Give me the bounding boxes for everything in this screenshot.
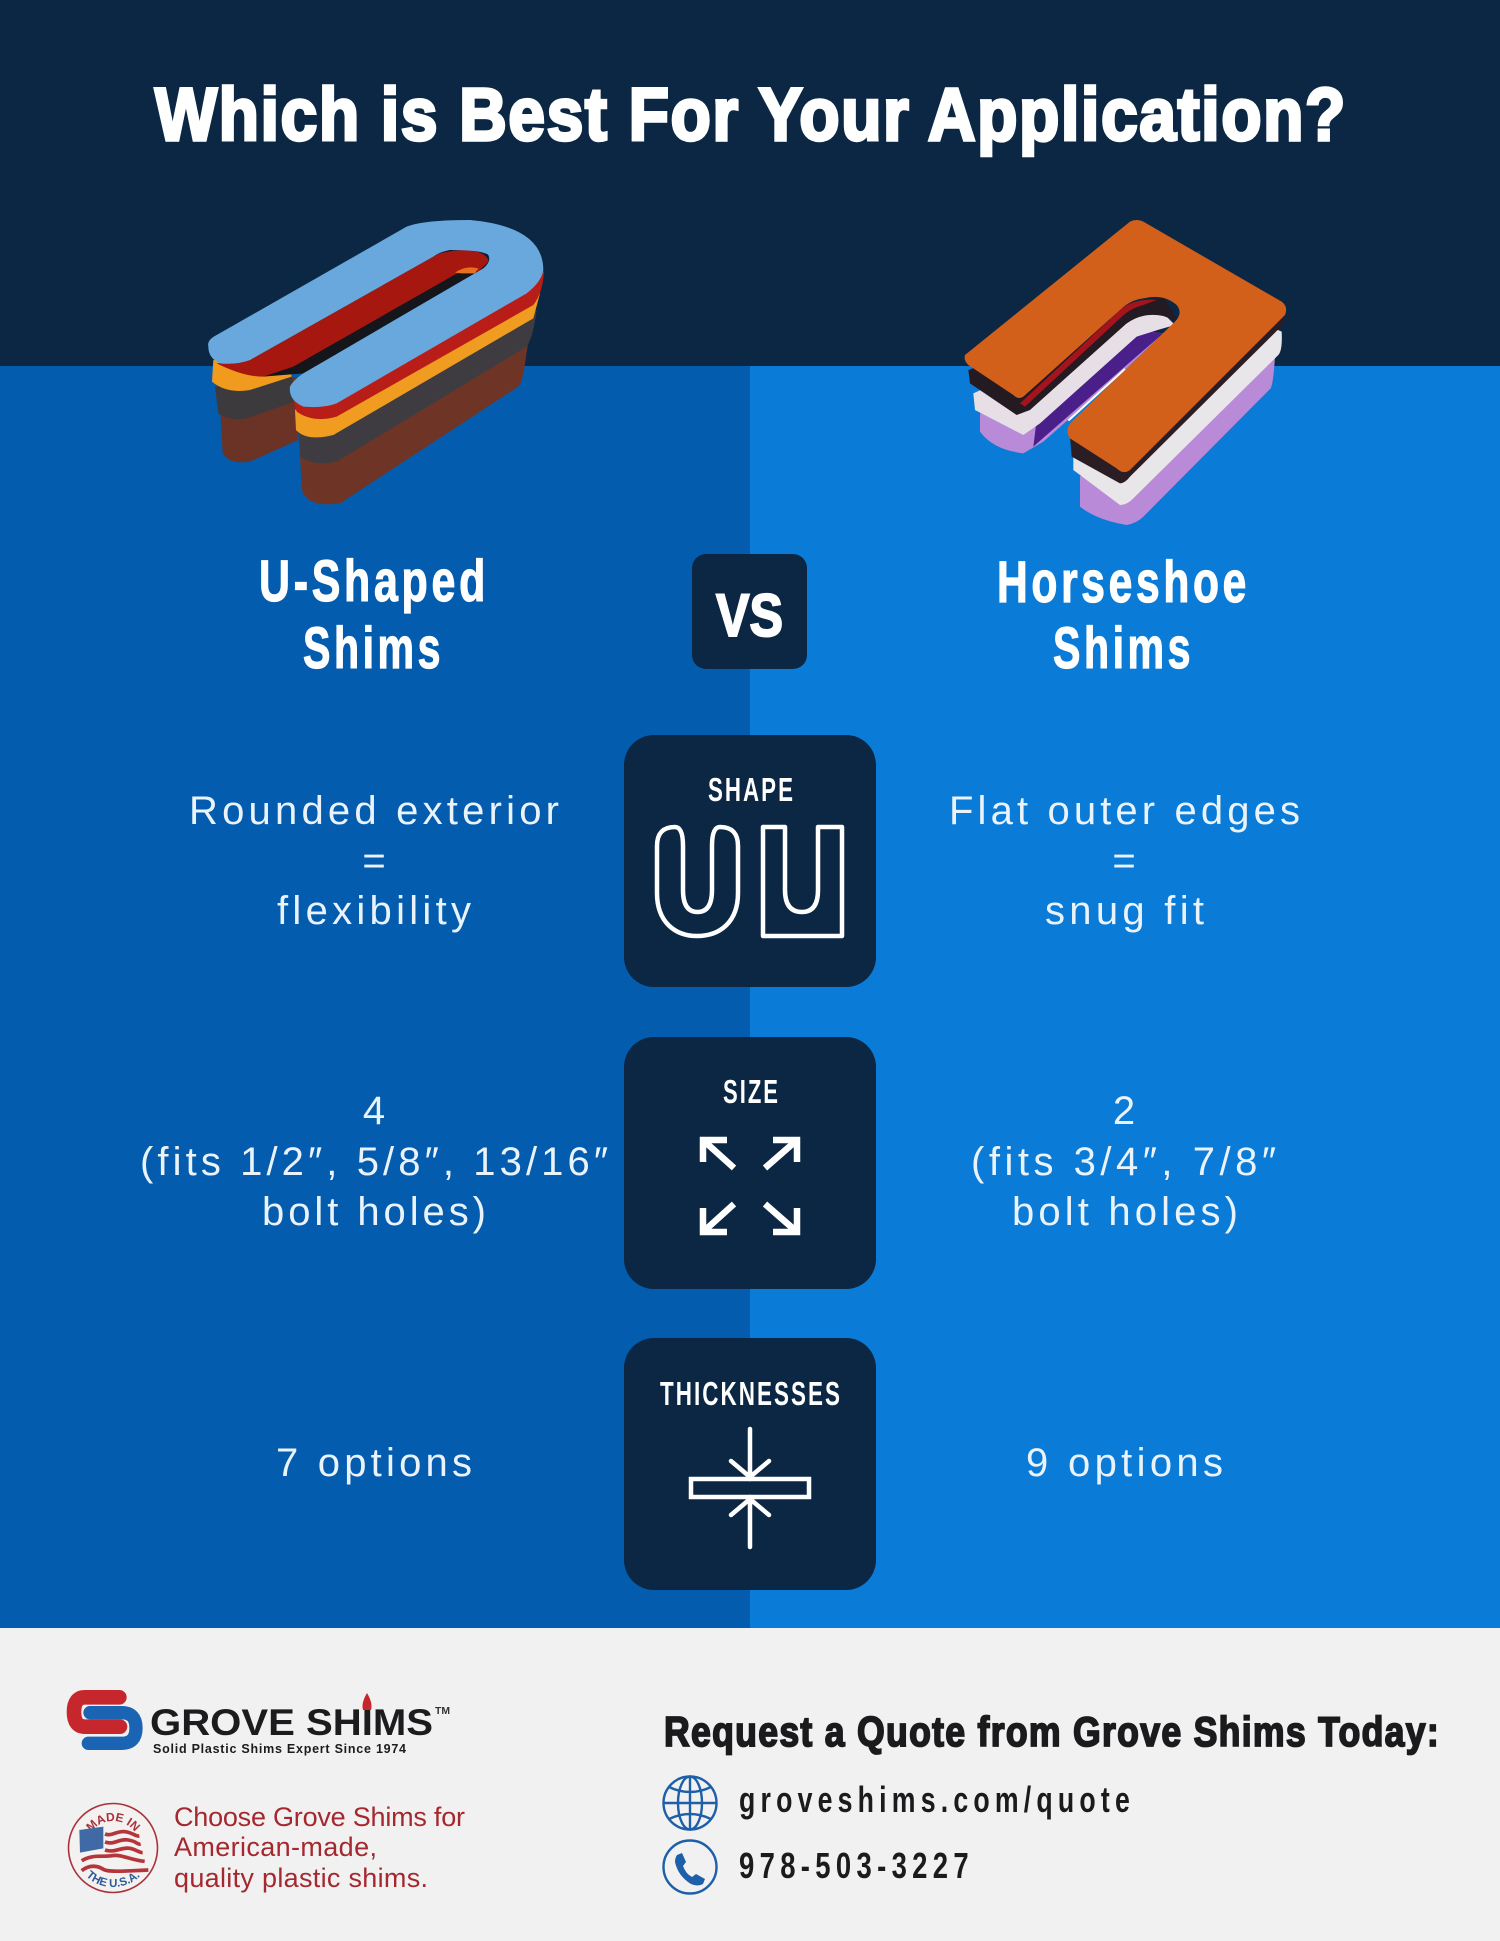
heading: U-shaped shims: U-Shaped bbox=[259, 549, 489, 614]
text: American-made message bbox=[174, 1802, 465, 1893]
text: U-shaped size description: (fits 1/2″, 5/8″, 13/16″ bbox=[140, 1140, 608, 1184]
text: quote URL: groveshims.com/quote bbox=[739, 1779, 1135, 1820]
logo: Grove Shims bbox=[74, 1693, 450, 1756]
card: size bbox=[624, 1037, 876, 1289]
card: thicknesses bbox=[624, 1338, 876, 1590]
heading: U-shaped shims: Shims bbox=[303, 616, 444, 681]
badge: made in the USA bbox=[68, 1802, 158, 1894]
text: horseshoe size description: bolt holes) bbox=[1012, 1190, 1238, 1234]
panel: right column background bbox=[750, 366, 1500, 1628]
icon: flame over the I bbox=[362, 1693, 372, 1710]
title: Which is Best For Your Application? bbox=[155, 73, 1347, 156]
heading: U-shaped shims bbox=[259, 549, 489, 681]
card: shape: SHAPE bbox=[708, 771, 795, 808]
image: U-shaped shim stack bbox=[208, 220, 544, 504]
text: U-shaped size description bbox=[140, 1089, 608, 1234]
logo: Grove Shims: TM bbox=[435, 1706, 450, 1717]
text: U-shaped thickness options: 7 options bbox=[276, 1441, 472, 1485]
icon: square U outline bbox=[763, 827, 842, 936]
text: U-shaped shape description: flexibility bbox=[277, 889, 471, 933]
text: horseshoe shape description: Flat outer edges bbox=[949, 789, 1300, 833]
logo: Grove Shims: Solid Plastic Shims Expert Since 1974 bbox=[153, 1742, 406, 1756]
icon: expand arrows bbox=[703, 1140, 797, 1232]
badge: made in the USA: MADE IN bbox=[86, 1812, 140, 1832]
card: thicknesses: THICKNESSES bbox=[660, 1375, 842, 1412]
image: horseshoe shim stack bbox=[965, 220, 1286, 525]
heading: horseshoe shims bbox=[997, 550, 1250, 681]
text: U-shaped shape description: Rounded exterior bbox=[189, 789, 559, 833]
icon: flag bbox=[79, 1827, 148, 1871]
text: horseshoe shape description: snug fit bbox=[1045, 889, 1204, 933]
text: horseshoe thickness options: 9 options bbox=[1026, 1441, 1223, 1485]
text: horseshoe shape description bbox=[949, 789, 1300, 933]
text: American-made message: American-made, bbox=[174, 1832, 377, 1862]
icon: rounded U outline bbox=[657, 827, 738, 936]
text: U-shaped shape description: = bbox=[362, 839, 386, 883]
text: U-shaped shape description bbox=[189, 789, 559, 933]
panel: footer background bbox=[0, 1628, 1500, 1941]
text: horseshoe size description: 2 bbox=[1113, 1089, 1135, 1133]
text: horseshoe size description: (fits 3/4″, 7/8″ bbox=[971, 1140, 1276, 1184]
text: American-made message: Choose Grove Shims for bbox=[174, 1802, 465, 1832]
text: U-shaped size description: 4 bbox=[363, 1089, 385, 1133]
panel: left column background bbox=[0, 366, 750, 1628]
icon: thickness compression bbox=[691, 1429, 809, 1547]
icon: interlocked S mark bbox=[74, 1697, 136, 1743]
text: American-made message: quality plastic shims. bbox=[174, 1863, 428, 1893]
card: size: SIZE bbox=[723, 1073, 780, 1110]
text: horseshoe shape description: = bbox=[1112, 839, 1136, 883]
badge: VS bbox=[692, 554, 807, 669]
text: horseshoe size description bbox=[971, 1089, 1276, 1234]
card: shape bbox=[624, 735, 876, 987]
badge: VS: VS bbox=[716, 582, 783, 649]
heading: horseshoe shims: Horseshoe bbox=[997, 550, 1250, 615]
text: phone number: 978-503-3227 bbox=[739, 1845, 974, 1886]
text: U-shaped size description: bolt holes) bbox=[262, 1190, 486, 1234]
badge: made in the USA: THE U.S.A. bbox=[88, 1870, 140, 1888]
panel: header band bbox=[0, 0, 1500, 366]
icon: phone bbox=[664, 1840, 716, 1894]
heading: horseshoe shims: Shims bbox=[1053, 616, 1194, 681]
icon: globe bbox=[664, 1776, 716, 1830]
logo: Grove Shims: GROVE SHIMS bbox=[150, 1702, 433, 1743]
